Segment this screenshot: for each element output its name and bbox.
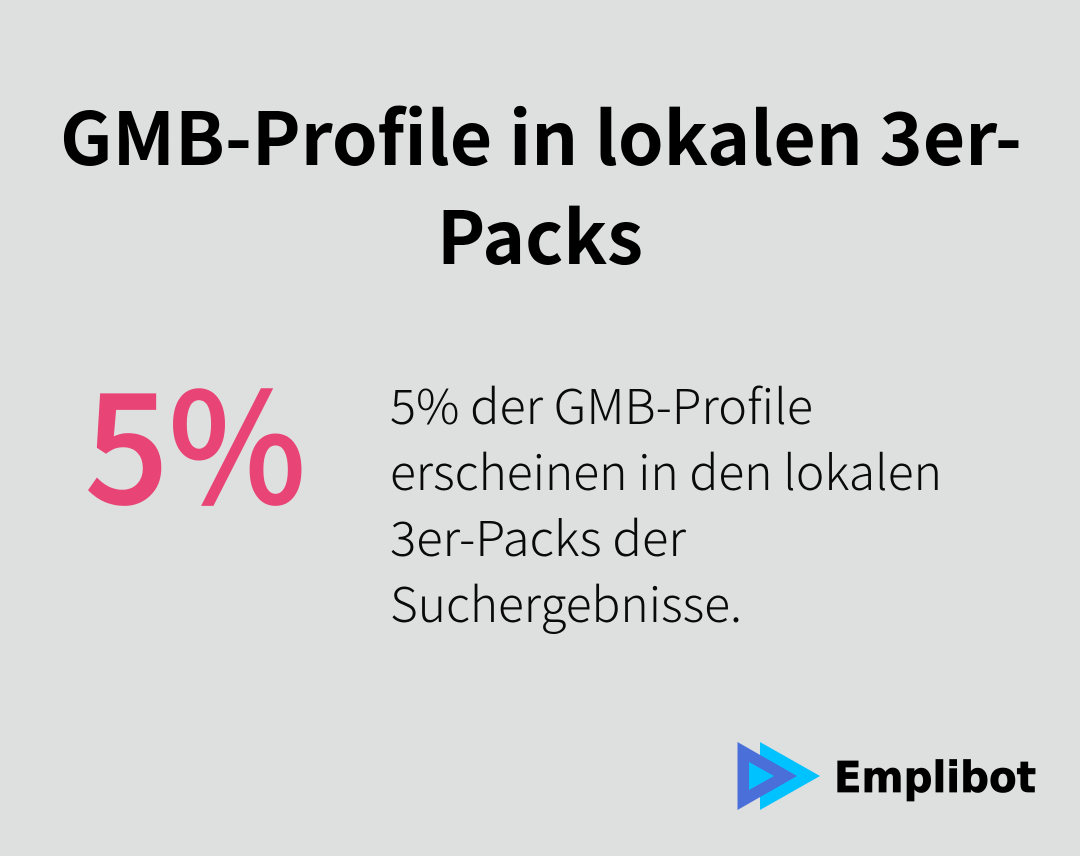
title: Packs — [437, 180, 643, 286]
description text: Suchergebnisse. — [390, 566, 742, 636]
description text: 3er-Packs der — [390, 500, 687, 570]
title: GMB-Profile in lokalen 3er- — [60, 81, 1022, 187]
icon: play triangles — [738, 742, 820, 810]
big statistic: 5%: 5% — [85, 327, 306, 547]
logo: Emplibot — [738, 742, 1036, 810]
title — [60, 81, 1022, 286]
description text: erscheinen in den lokalen — [390, 434, 942, 504]
logo wordmark: Emplibot — [834, 753, 1036, 803]
description text: 5% der GMB-Profile — [390, 368, 813, 438]
description text — [390, 368, 942, 636]
